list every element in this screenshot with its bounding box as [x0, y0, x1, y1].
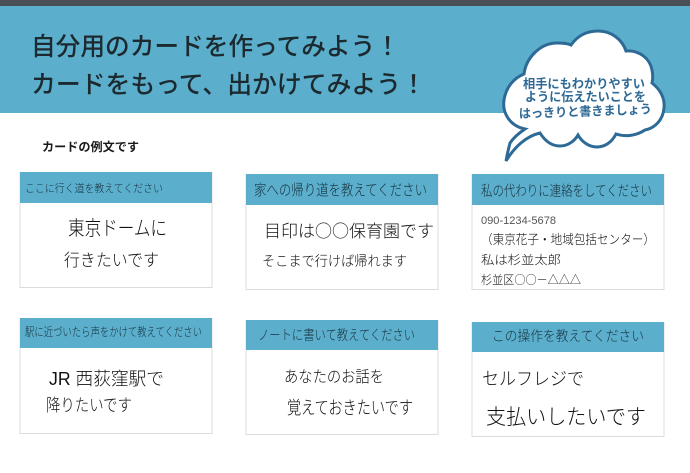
card 1: 東京ドームに	[68, 217, 167, 240]
card 1: 行きたいです	[64, 251, 159, 270]
top dark bar	[0, 0, 690, 6]
card 1	[20, 172, 212, 288]
card 4: JR 西荻窪駅で	[49, 369, 164, 389]
card 1: ここに行く道を教えてください	[25, 181, 163, 195]
card 6: 支払いしたいです	[486, 406, 646, 429]
card 2	[246, 174, 438, 290]
card 5: 覚えておきたいです	[287, 398, 413, 418]
card 5: あなたのお話を	[284, 368, 384, 386]
card 3: 私は杉並太郎	[481, 253, 561, 267]
card 5: ノートに書いて教えてください	[258, 327, 415, 343]
speech bubble callout	[504, 31, 664, 161]
card 3: （東京花子・地域包括センター）	[481, 232, 655, 247]
title	[31, 33, 426, 99]
bubble text: はっきりと書きましょう	[519, 101, 652, 121]
bubble text	[519, 76, 652, 121]
card 3: 杉並区○○－△△△	[481, 271, 581, 288]
title: 自分用のカードを作ってみよう！	[31, 33, 400, 61]
title: カードをもって、出かけてみよう！	[31, 71, 426, 99]
bubble text: ように伝えたいことを	[525, 90, 646, 104]
card 3: 090-1234-5678	[481, 215, 556, 227]
card 4: 降りたいです	[46, 396, 132, 415]
card 6	[472, 322, 664, 436]
card 5	[246, 320, 438, 434]
card 2: 家への帰り道を教えてください	[254, 182, 427, 199]
card 2: 目印は○○保育園です	[264, 217, 434, 242]
card 6: セルフレジで	[482, 369, 584, 389]
bubble text: 相手にもわかりやすい	[523, 76, 645, 91]
subheading: カードの例文です	[42, 139, 139, 154]
card 6: この操作を教えてください	[492, 328, 644, 344]
card 4	[20, 318, 212, 434]
card 4: 駅に近づいたら声をかけて教えてください	[25, 325, 202, 339]
card 2: そこまで行けば帰れます	[262, 253, 407, 269]
card 3	[472, 174, 664, 290]
header band	[0, 6, 690, 113]
